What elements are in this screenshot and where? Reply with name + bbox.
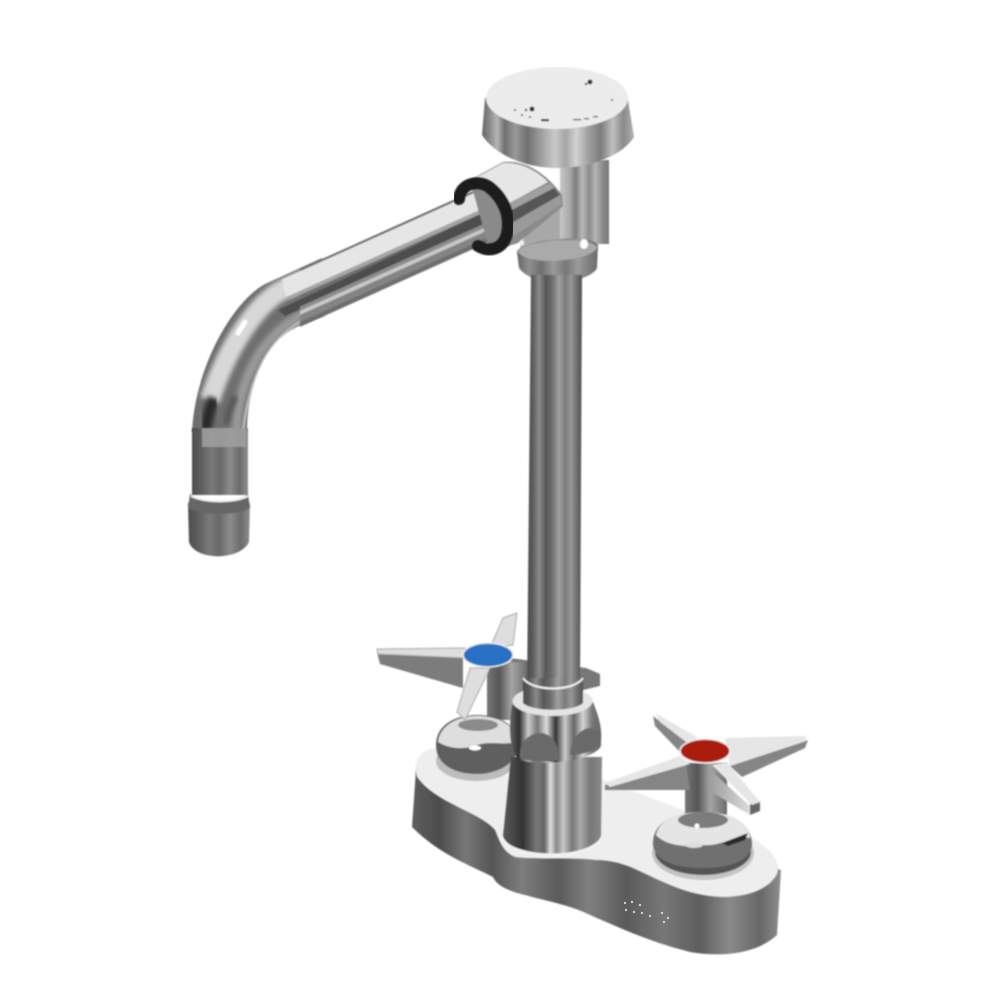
vertical valve body xyxy=(520,160,609,248)
nozzle xyxy=(188,428,250,556)
main stem column xyxy=(527,275,582,695)
red handle arm tips xyxy=(750,801,760,815)
flange ring xyxy=(512,686,592,716)
base plate engraved marks xyxy=(624,901,669,923)
blue handle stem xyxy=(487,662,528,720)
bell base highlight xyxy=(501,836,603,855)
collar domes xyxy=(520,728,601,762)
blue handle arm top surfaces xyxy=(377,613,517,720)
valve head cap xyxy=(482,67,634,168)
right valve nut xyxy=(652,812,754,880)
spout collar elbow xyxy=(470,162,563,252)
illustration: laboratory faucet xyxy=(187,67,808,956)
icon: blue cold indicator xyxy=(463,643,513,667)
blue handle xyxy=(377,613,517,720)
spout straight section xyxy=(278,179,500,327)
lower collar nut xyxy=(517,239,598,282)
knurled collar xyxy=(510,702,601,762)
blue handle rear arm xyxy=(510,658,600,690)
blue handle arm faces xyxy=(377,652,463,688)
red handle stem xyxy=(685,763,727,815)
spout bend xyxy=(192,258,330,432)
nozzle tip xyxy=(188,503,250,556)
black ring on spout xyxy=(459,183,508,249)
left valve nut xyxy=(436,715,518,781)
nozzle upper barrel xyxy=(192,428,248,495)
lower body bell xyxy=(501,678,603,855)
red handle arm faces xyxy=(605,716,808,790)
nozzle groove xyxy=(188,494,250,514)
red handle lower arm face xyxy=(708,768,750,815)
red handle xyxy=(605,713,808,815)
lower stem cylinder xyxy=(523,678,583,710)
cap markings xyxy=(514,80,613,121)
base plate top surface xyxy=(415,748,778,897)
icon: red hot indicator xyxy=(680,739,730,763)
red handle arm top surfaces xyxy=(605,713,806,805)
base plate side xyxy=(412,770,781,954)
